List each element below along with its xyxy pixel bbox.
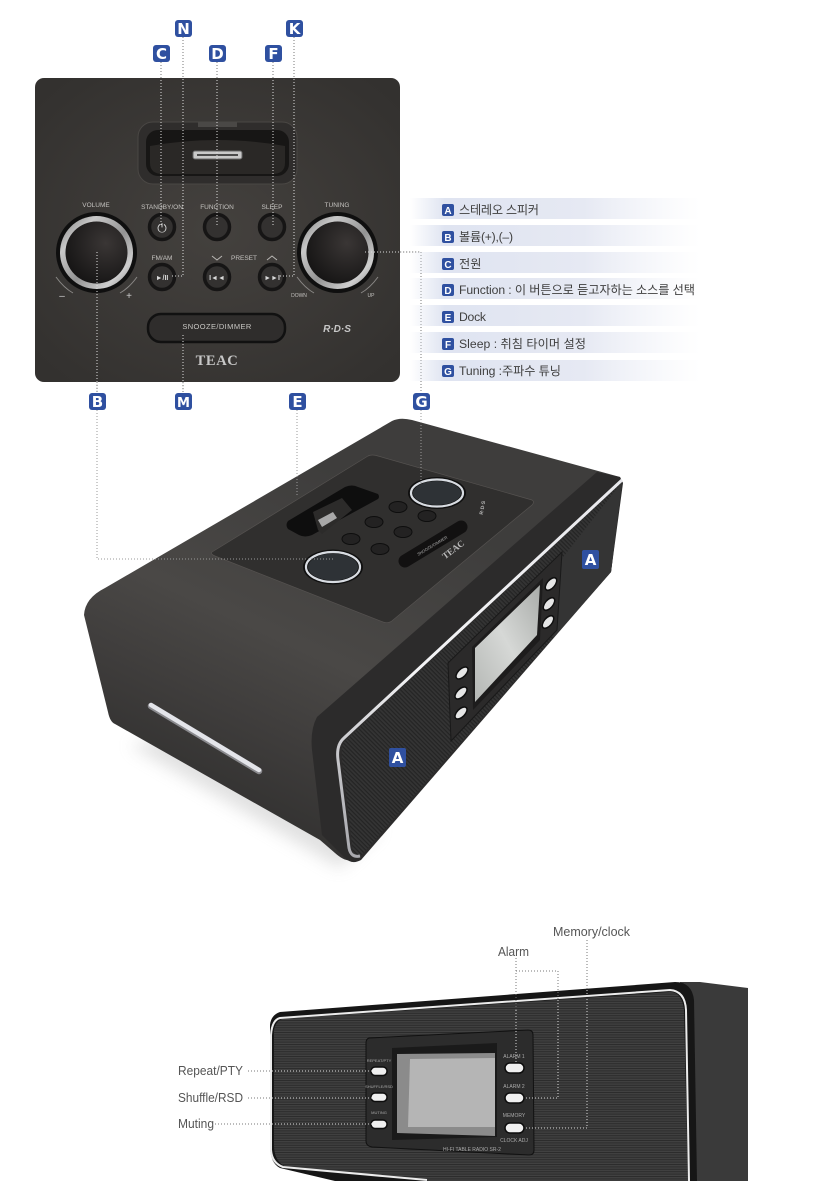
small knobs bbox=[303, 550, 363, 584]
legend text: Sleep : 취침 타이머 설정 bbox=[459, 337, 586, 351]
legend badge letters: F bbox=[445, 340, 451, 351]
top control plate: R·D·S bbox=[479, 500, 487, 515]
snooze bar bbox=[405, 527, 461, 561]
TEAC logo: TEAC bbox=[196, 353, 238, 369]
front dark frame bbox=[312, 472, 623, 862]
callout leader lines bbox=[215, 940, 587, 1128]
button labels bbox=[141, 204, 282, 282]
volume knob: VOLUME bbox=[82, 202, 110, 209]
badge M: M bbox=[177, 396, 190, 411]
LCD bbox=[472, 578, 543, 710]
front button labels bbox=[365, 1054, 528, 1153]
front button labels: HI-FI TABLE RADIO SR-2 bbox=[443, 1147, 501, 1153]
front button labels: MUTING bbox=[371, 1110, 387, 1115]
tuning knob: DOWN bbox=[291, 293, 307, 299]
front button labels: ALARM 2 bbox=[503, 1084, 525, 1090]
chrome trim bbox=[338, 480, 622, 856]
LCD screen bbox=[397, 1053, 495, 1136]
legend text: 볼륨(+),(–) bbox=[459, 230, 513, 244]
legend badge letters: D bbox=[444, 286, 452, 297]
chrome trim bbox=[271, 990, 689, 1181]
display bezel bbox=[448, 552, 562, 741]
badge C bbox=[153, 45, 170, 63]
button labels: ⏻ bbox=[157, 221, 167, 235]
badge A right: A bbox=[585, 551, 597, 569]
badge B bbox=[89, 393, 106, 411]
radio leader lines bbox=[97, 410, 421, 559]
front button labels: REPEAT/PTY bbox=[367, 1058, 392, 1063]
legend text: Function : 이 버튼으로 듣고자하는 소스를 선택 bbox=[459, 283, 695, 297]
snooze button bbox=[148, 314, 285, 342]
callout labels: Shuffle/RSD bbox=[178, 1090, 243, 1105]
chrome side bar bbox=[151, 705, 259, 771]
tuning knob bbox=[291, 202, 378, 299]
button labels: PRESET bbox=[231, 255, 257, 262]
legend badge letters bbox=[444, 206, 452, 378]
legend badge letters: E bbox=[445, 313, 452, 324]
panel buttons bbox=[150, 214, 284, 290]
badge F: F bbox=[268, 45, 279, 63]
side face bbox=[680, 982, 748, 1181]
badge A right bbox=[582, 550, 599, 569]
badge C: C bbox=[156, 45, 167, 63]
front button labels: SHUFFLE/RSD bbox=[365, 1084, 393, 1089]
legend text: Tuning :주파수 튜닝 bbox=[459, 364, 561, 378]
volume knob bbox=[56, 202, 137, 302]
display bezel bbox=[366, 1030, 534, 1155]
legend text bbox=[459, 203, 695, 378]
radio perspective photo bbox=[84, 419, 623, 868]
front button labels: ALARM 1 bbox=[503, 1054, 525, 1060]
front button labels: CLOCK ADJ bbox=[500, 1138, 528, 1144]
button labels: FM/AM bbox=[152, 255, 172, 262]
badge A front bbox=[389, 748, 406, 767]
legend text: 전원 bbox=[459, 257, 481, 271]
callout labels: Repeat/PTY bbox=[178, 1063, 243, 1078]
button labels: STANDBY/ON bbox=[141, 204, 183, 211]
badge N: N bbox=[177, 20, 190, 38]
button labels: SLEEP bbox=[262, 204, 282, 211]
display buttons bbox=[453, 576, 559, 721]
badge F bbox=[265, 45, 282, 63]
RDS logo: R·D·S bbox=[323, 324, 351, 335]
callout labels: Memory/clock bbox=[553, 924, 630, 939]
badge K bbox=[286, 20, 303, 38]
legend badge letters: B bbox=[444, 233, 452, 244]
radio front photo bbox=[270, 982, 748, 1181]
LCD frame bbox=[392, 1043, 497, 1140]
callout labels: Alarm bbox=[498, 944, 529, 959]
body top and end bbox=[84, 419, 622, 860]
speaker grille left bbox=[342, 482, 622, 858]
speaker panel right bbox=[553, 482, 622, 638]
badge K: K bbox=[289, 20, 302, 38]
speaker grille bbox=[274, 992, 688, 1181]
front buttons bbox=[371, 1063, 524, 1133]
snooze button: SNOOZE/DIMMER bbox=[182, 322, 252, 331]
volume knob: – bbox=[59, 291, 65, 302]
badge E bbox=[289, 393, 306, 411]
badge B: B bbox=[92, 393, 103, 411]
dock slot bbox=[286, 486, 379, 536]
top control plate bbox=[211, 455, 533, 623]
legend text: 스테레오 스피커 bbox=[459, 203, 539, 217]
badge D: D bbox=[211, 45, 224, 63]
badge A front: A bbox=[392, 749, 404, 767]
legend badge letters: G bbox=[444, 367, 452, 378]
panel leader lines bbox=[97, 37, 421, 392]
button labels: ►►I bbox=[264, 275, 280, 282]
badge M bbox=[175, 393, 192, 411]
shadow bbox=[130, 730, 380, 868]
small buttons bbox=[342, 502, 436, 554]
legend text: Dock bbox=[459, 310, 487, 324]
tuning knob: UP bbox=[368, 293, 375, 299]
callout labels bbox=[178, 924, 630, 1131]
button labels: FUNCTION bbox=[200, 204, 234, 211]
front button labels: MEMORY bbox=[503, 1113, 526, 1119]
top control plate: TEAC bbox=[440, 538, 466, 561]
legend badge letters: C bbox=[444, 260, 452, 271]
volume knob: + bbox=[126, 291, 132, 302]
badge E: E bbox=[292, 393, 303, 411]
front frame bbox=[270, 982, 697, 1181]
legend badge letters: A bbox=[444, 206, 452, 217]
button labels: ►/II bbox=[156, 275, 168, 282]
legend badges bbox=[442, 204, 454, 377]
button labels: I◄◄ bbox=[209, 275, 225, 282]
badge G: G bbox=[415, 393, 428, 411]
top control plate: SNOOZE/DIMMER bbox=[416, 535, 448, 557]
dock bbox=[138, 122, 297, 184]
callout labels: Muting bbox=[178, 1116, 214, 1131]
tuning knob: TUNING bbox=[325, 202, 349, 209]
control panel photo bbox=[35, 78, 400, 382]
legend list bbox=[410, 198, 700, 381]
